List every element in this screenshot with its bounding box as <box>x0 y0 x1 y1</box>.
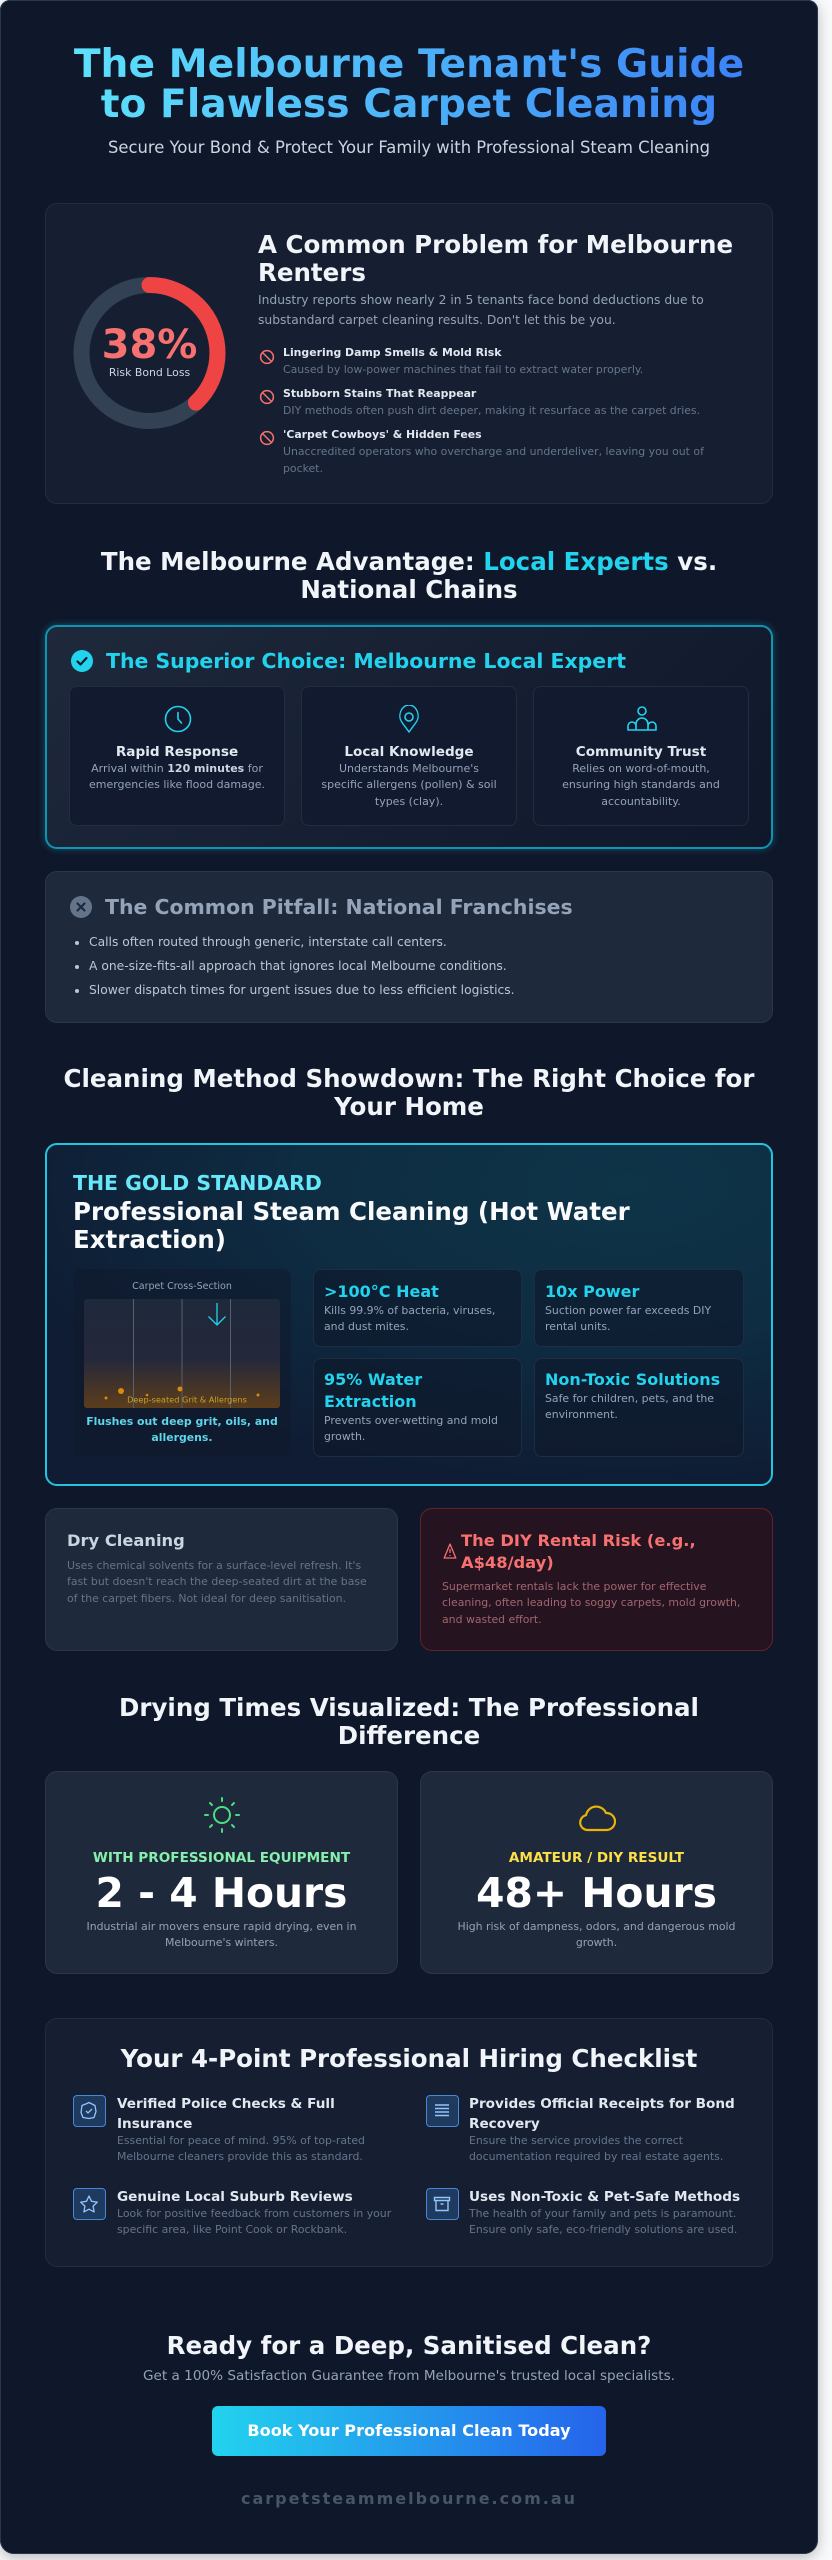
heading: Melbourne advantage: National Chains <box>300 574 518 604</box>
item: police checks: Essential for peace of mind. 95% of top-rated <box>117 2134 365 2147</box>
icon: prohibited 2 <box>260 390 274 404</box>
icon: shield clock <box>73 2095 106 2127</box>
card: rapid response: Rapid Response <box>116 744 238 760</box>
card: local knowledge: specific allergens (pollen) & soil <box>321 778 497 791</box>
gold standard heading: Extraction) <box>73 1224 226 1254</box>
DIY heading <box>461 1531 696 1572</box>
item: damp smells <box>283 346 643 376</box>
icon: warning triangle <box>444 1543 456 1559</box>
item: stubborn stains <box>283 387 700 417</box>
heading: drying times: Difference <box>338 1720 480 1750</box>
item: suburb reviews: specific area, like Point Cook or Rockbank. <box>117 2223 347 2236</box>
DIY text: cleaning, often leading to soggy carpets, mold growth, <box>442 1596 740 1609</box>
problem intro text <box>258 293 704 326</box>
item: police checks <box>117 2096 365 2163</box>
card: community trust: Community Trust <box>576 744 706 760</box>
pitfall heading: The Common Pitfall: National Franchises <box>105 895 573 919</box>
item: damp smells: Lingering Damp Smells & Mold Risk <box>283 346 501 359</box>
heading: Melbourne advantage: The Melbourne Advantage: Local Experts vs. <box>101 547 717 576</box>
card: local knowledge: types (clay). <box>375 795 443 808</box>
CTA button <box>212 2406 606 2456</box>
card: community trust: ensuring high standards and <box>562 778 720 791</box>
professional drying time: 2 - 4 Hours <box>96 1869 347 1917</box>
feature: water extraction: growth. <box>324 1430 365 1443</box>
icon: archive box <box>426 2188 459 2220</box>
dry cleaning text: Uses chemical solvents for a surface-level refresh. It's <box>67 1559 361 1572</box>
icon: check badge <box>71 650 93 672</box>
problem heading: Renters <box>258 258 366 286</box>
heading: cleaning method showdown: Your Home <box>334 1092 484 1120</box>
heading: cleaning method showdown <box>64 1064 754 1120</box>
gold standard heading <box>73 1197 630 1254</box>
DIY text: Supermarket rentals lack the power for effective <box>442 1580 706 1593</box>
problem heading <box>258 230 733 286</box>
panel: professional drying <box>45 1771 398 1974</box>
dry cleaning text <box>67 1559 367 1605</box>
title <box>70 45 748 125</box>
item: official receipts: documentation required by real estate agents. <box>469 2150 723 2163</box>
feature: heat: Kills 99.9% of bacteria, viruses, <box>324 1304 495 1317</box>
dry cleaning text: fast but doesn't reach the deep-seated dirt at the base <box>67 1575 367 1588</box>
card: local knowledge <box>301 686 517 826</box>
professional note: Melbourne's winters. <box>165 1936 278 1949</box>
icon: prohibited 3 <box>260 430 274 446</box>
heading: cleaning method showdown: Cleaning Method Showdown: The Right Choice for <box>64 1064 754 1093</box>
card: local knowledge: Understands Melbourne's <box>339 762 479 775</box>
feature: power: Suction power far exceeds DIY <box>545 1304 711 1317</box>
dry cleaning heading: Dry Cleaning <box>67 1531 185 1550</box>
item: non-toxic methods: The health of your family and pets is paramount. <box>469 2207 736 2220</box>
panel: DIY rental risk <box>420 1508 773 1651</box>
professional note: Industrial air movers ensure rapid drying, even in <box>86 1920 356 1933</box>
item: carpet cowboys <box>283 428 704 474</box>
item: stubborn stains: DIY methods often push dirt deeper, making it resurface as the carpet dries. <box>283 404 700 417</box>
superior choice heading: The Superior Choice: Melbourne Local Expert <box>106 649 626 673</box>
item: police checks: Insurance <box>117 2116 192 2132</box>
card: community trust: Relies on word-of-mouth, <box>572 762 710 775</box>
icon: sun <box>204 1797 240 1833</box>
pitfall bullet list: Slower dispatch times for urgent issues due to less efficient logistics. <box>89 983 515 997</box>
diagram caption: Flushes out deep grit, oils, and <box>86 1415 278 1428</box>
feature: non-toxic: Safe for children, pets, and the <box>545 1392 714 1405</box>
DIY text <box>442 1580 740 1626</box>
problem heading: A Common Problem for Melbourne <box>258 230 733 259</box>
feature: heat <box>313 1269 522 1347</box>
panel: superior choice <box>45 625 773 849</box>
icon: receipt lines <box>426 2095 459 2127</box>
subtitle: Secure Your Bond & Protect Your Family with Professional Steam Cleaning <box>108 138 710 157</box>
panel: common pitfall <box>45 871 773 1023</box>
item: non-toxic methods: Ensure only safe, eco-friendly solutions are used. <box>469 2223 737 2236</box>
heading: drying times: Drying Times Visualized: The Professional <box>119 1693 699 1722</box>
amateur note <box>458 1920 735 1949</box>
gold standard label: THE GOLD STANDARD <box>73 1171 322 1195</box>
item: police checks: Melbourne cleaners provide this as standard. <box>117 2150 363 2163</box>
icon: people <box>627 706 657 731</box>
panel: hiring checklist <box>45 2018 773 2267</box>
pitfall bullet list <box>75 935 515 997</box>
problem intro text: substandard carpet cleaning results. Don't let this be you. <box>258 312 616 326</box>
problem intro text: Industry reports show nearly 2 in 5 tenants face bond deductions due to <box>258 293 704 307</box>
feature: non-toxic <box>534 1358 744 1457</box>
website footer: carpetsteammelbourne.com.au <box>241 2489 577 2508</box>
donut chart: 38% risk bond loss <box>74 277 226 429</box>
item: official receipts: Recovery <box>469 2116 540 2132</box>
DIY heading: A$48/day) <box>461 1553 554 1572</box>
item: damp smells: Caused by low-power machines that fail to extract water properly. <box>283 363 643 376</box>
professional note <box>86 1920 356 1949</box>
gold standard heading: Professional Steam Cleaning (Hot Water <box>73 1197 630 1226</box>
icon: map pin <box>399 705 419 733</box>
feature: non-toxic: environment. <box>545 1408 618 1421</box>
item: official receipts: Ensure the service provides the correct <box>469 2134 683 2147</box>
card: rapid response: Arrival within 120 minutes for <box>91 762 263 775</box>
feature: heat: >100°C Heat <box>324 1282 439 1301</box>
pitfall bullet list: Calls often routed through generic, interstate call centers. <box>89 935 447 949</box>
item: suburb reviews: Look for positive feedback from customers in your <box>117 2207 391 2220</box>
amateur drying time: 48+ Hours <box>476 1869 717 1917</box>
feature: water extraction <box>313 1358 522 1457</box>
item: non-toxic methods: Uses Non-Toxic & Pet-Safe Methods <box>469 2189 740 2205</box>
item: stubborn stains: Stubborn Stains That Reappear <box>283 387 476 400</box>
amateur note: growth. <box>576 1936 617 1949</box>
item: suburb reviews <box>117 2189 392 2236</box>
card: rapid response: emergencies like flood damage. <box>89 778 265 791</box>
icon: prohibited 1 <box>260 350 274 364</box>
item: carpet cowboys: pocket. <box>283 462 323 474</box>
feature: heat: and dust mites. <box>324 1320 409 1333</box>
item: police checks: Verified Police Checks & Full <box>117 2096 335 2112</box>
amateur label: AMATEUR / DIY RESULT <box>509 1850 684 1866</box>
icon: x badge <box>70 896 92 918</box>
item: carpet cowboys: Unaccredited operators who overcharge and underdeliver, leaving you out of <box>283 445 704 458</box>
feature: water extraction: Extraction <box>324 1392 417 1411</box>
feature: non-toxic: Non-Toxic Solutions <box>545 1370 720 1389</box>
icon: cloud <box>579 1806 616 1832</box>
card: community trust: accountability. <box>601 795 681 808</box>
diagram caption <box>86 1415 278 1444</box>
title: to Flawless Carpet Cleaning <box>101 82 717 127</box>
panel: common problem <box>45 203 773 504</box>
feature: power: 10x Power <box>545 1282 639 1301</box>
DIY text: and wasted effort. <box>442 1613 542 1626</box>
DIY heading: The DIY Rental Risk (e.g., <box>461 1531 696 1550</box>
pitfall bullet list: A one-size-fits-all approach that ignores local Melbourne conditions. <box>89 959 507 973</box>
carpet illustration <box>84 1299 280 1408</box>
feature: water extraction: 95% Water <box>324 1370 422 1389</box>
title: The Melbourne Tenant's Guide <box>74 42 744 87</box>
item: carpet cowboys: 'Carpet Cowboys' & Hidden Fees <box>283 428 482 441</box>
panel: dry cleaning <box>45 1508 398 1651</box>
heading: Melbourne advantage <box>101 547 717 604</box>
dry cleaning text: of the carpet fibers. Not ideal for deep sanitisation. <box>67 1592 346 1605</box>
icon: star <box>73 2188 106 2220</box>
CTA heading: Ready for a Deep, Sanitised Clean? <box>167 2331 651 2360</box>
diagram label: Carpet Cross-Section <box>132 1281 232 1292</box>
CTA subtext: Get a 100% Satisfaction Guarantee from Melbourne's trusted local specialists. <box>143 2368 675 2384</box>
professional label: WITH PROFESSIONAL EQUIPMENT <box>93 1850 350 1866</box>
donut chart: 38% risk bond loss: Risk Bond Loss <box>109 366 190 379</box>
feature: water extraction: Prevents over-wetting and mold <box>324 1414 498 1427</box>
item: non-toxic methods <box>469 2189 740 2236</box>
heading: drying times <box>119 1693 699 1750</box>
panel: gold standard <box>45 1143 773 1486</box>
item: suburb reviews: Genuine Local Suburb Reviews <box>117 2189 353 2205</box>
panel: amateur drying <box>420 1771 773 1974</box>
carpet illustration: Deep-seated Grit & Allergens <box>127 1394 247 1404</box>
donut chart: 38% risk bond loss: 38% <box>102 322 197 368</box>
amateur note: High risk of dampness, odors, and dangerous mold <box>458 1920 735 1933</box>
diagram: carpet cross-section <box>73 1269 291 1457</box>
CTA button: Book Your Professional Clean Today <box>247 2421 571 2440</box>
card: local knowledge: Local Knowledge <box>344 744 474 760</box>
diagram caption: allergens. <box>151 1431 213 1444</box>
icon: clock <box>164 706 192 732</box>
feature: power <box>534 1269 744 1347</box>
card: rapid response <box>69 686 285 826</box>
feature: power: rental units. <box>545 1320 611 1333</box>
checklist heading: Your 4-Point Professional Hiring Checklist <box>121 2044 697 2073</box>
item: official receipts <box>469 2096 735 2163</box>
item: official receipts: Provides Official Receipts for Bond <box>469 2096 735 2112</box>
card: community trust <box>533 686 749 826</box>
